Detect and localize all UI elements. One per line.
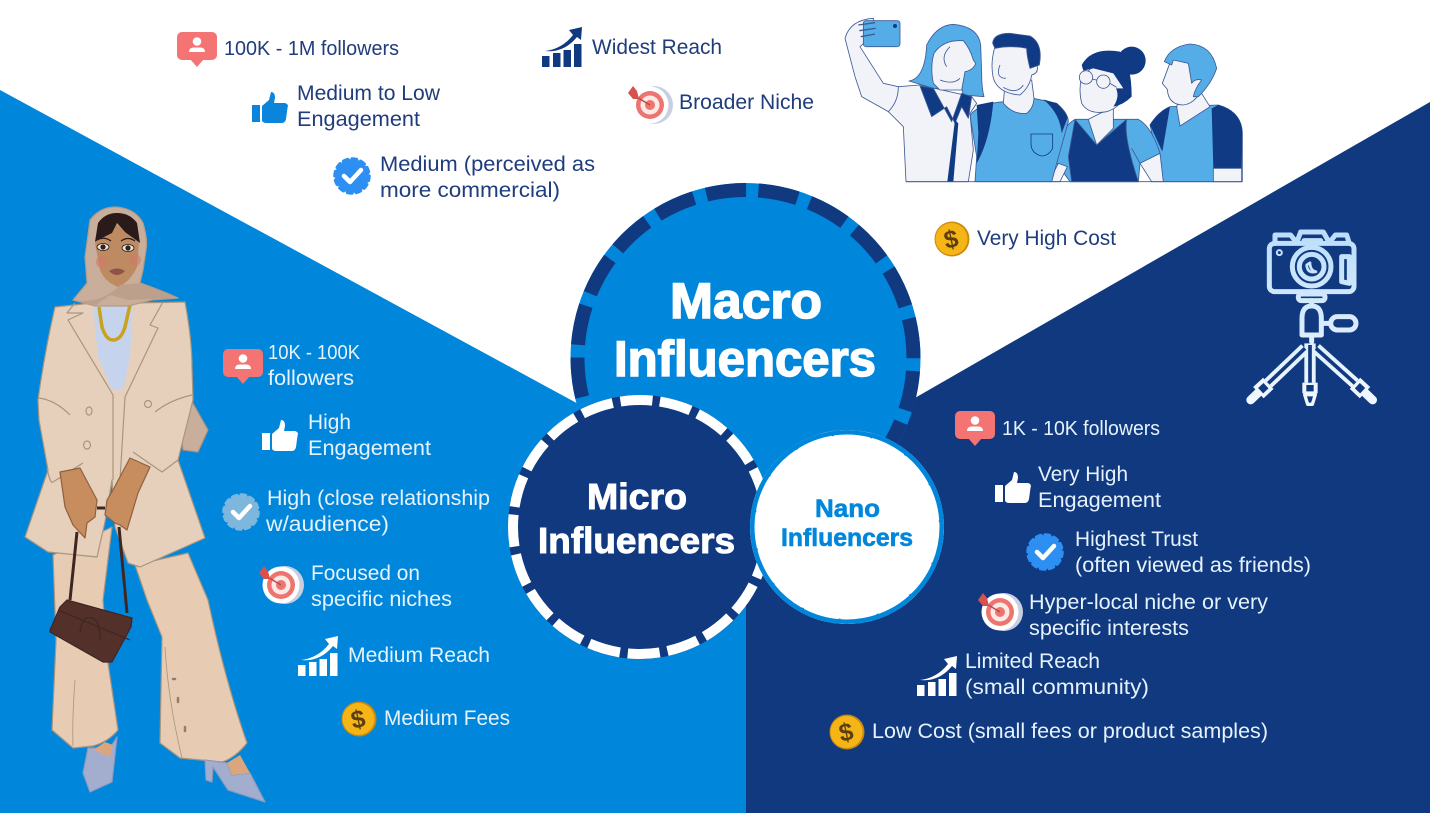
circle: Macro Influencers: Influencers: [614, 331, 876, 387]
macro: niche: [628, 86, 814, 124]
macro: followers: [177, 32, 399, 67]
circle: Nano Influencers: Nano: [815, 495, 880, 523]
macro: niche: Broader Niche: [679, 91, 814, 114]
micro: reach: Medium Reach: [348, 644, 490, 667]
micro: followers: followers: [268, 367, 354, 390]
nano: reach: (small community): [965, 676, 1149, 699]
micro: engagement: Engagement: [308, 437, 431, 460]
micro: followers: 10K - 100K: [268, 342, 361, 364]
circle: Macro Influencers: [565, 178, 926, 538]
circle: Micro Influencers: Micro: [587, 476, 687, 517]
nano: niche: specific interests: [1029, 617, 1189, 640]
micro: cost: [342, 702, 510, 736]
micro: engagement: High: [308, 411, 351, 434]
macro: reach: [542, 27, 722, 67]
nano: trust: (often viewed as friends): [1075, 554, 1311, 577]
macro: followers: 100K - 1M followers: [224, 38, 399, 60]
macro: trust: Medium (perceived as: [380, 153, 595, 176]
micro: niche: specific niches: [311, 588, 452, 611]
macro: reach: Widest Reach: [592, 36, 722, 59]
circle: Micro Influencers: [495, 382, 785, 672]
nano: reach: [917, 650, 1149, 699]
macro: engagement: [252, 82, 441, 131]
micro: trust: w/audience): [265, 513, 389, 536]
circle: Nano Influencers: Influencers: [781, 524, 913, 552]
micro: reach: [298, 636, 490, 676]
nano: trust: [1028, 528, 1311, 577]
micro: niche: Focused on: [311, 562, 420, 585]
micro: trust: High (close relationship: [267, 487, 490, 510]
panel: micro blue background: [0, 90, 746, 813]
macro: engagement: Medium to Low: [297, 82, 441, 105]
illustration: camera on tripod: [1251, 232, 1373, 404]
nano: engagement: [995, 463, 1161, 512]
nano: engagement: Engagement: [1038, 489, 1161, 512]
circle: Micro Influencers: Influencers: [538, 520, 735, 561]
nano: niche: [978, 591, 1268, 640]
nano: cost: [830, 714, 1268, 750]
nano: trust: Highest Trust: [1075, 528, 1198, 551]
micro: followers: [223, 342, 361, 390]
nano: cost: Low Cost (small fees or product samples): [872, 720, 1268, 743]
nano: followers: [955, 411, 1160, 446]
macro: cost: Very High Cost: [977, 227, 1116, 250]
micro: niche: [259, 562, 452, 611]
nano: niche: Hyper-local niche or very: [1029, 591, 1268, 614]
panel: nano navy background: [746, 102, 1430, 813]
macro: trust: more commercial): [380, 179, 560, 202]
micro: trust: [224, 487, 490, 536]
macro: trust: [335, 153, 595, 202]
macro: cost: [934, 222, 1116, 256]
illustration: woman in beige suit: [25, 207, 265, 802]
micro: engagement: [262, 411, 431, 460]
macro: engagement: Engagement: [297, 108, 420, 131]
illustration: group selfie: [845, 18, 1242, 182]
nano: followers: 1K - 10K followers: [1002, 418, 1160, 440]
nano: engagement: Very High: [1038, 463, 1128, 486]
micro: cost: Medium Fees: [384, 707, 510, 730]
nano: reach: Limited Reach: [965, 650, 1100, 673]
circle: Nano Influencers: [750, 430, 944, 624]
circle: Macro Influencers: Macro: [670, 273, 822, 329]
